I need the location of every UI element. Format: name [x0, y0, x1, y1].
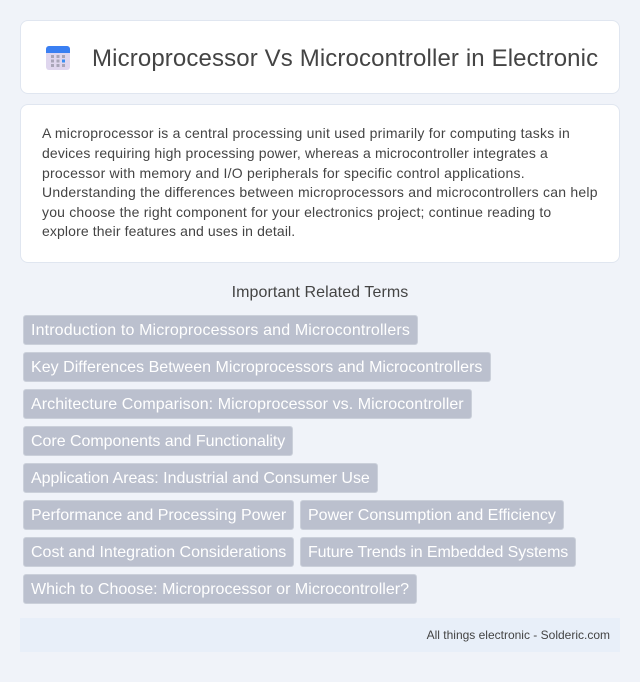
tag: Power Consumption and Efficiency: [308, 507, 556, 524]
heading: related terms: Important Related Terms: [232, 284, 408, 301]
tag: [23, 426, 293, 456]
footer: [20, 618, 620, 652]
tag: Future Trends in Embedded Systems: [308, 544, 568, 561]
text block: description: [42, 125, 598, 239]
tag: Architecture Comparison: Microprocessor vs. Microcontroller: [31, 396, 464, 413]
text block: description: A microprocessor is a central processing unit used primarily for computing tasks in: [42, 125, 570, 141]
tag: Core Components and Functionality: [31, 433, 285, 450]
tag: Key Differences Between Microprocessors and Microcontrollers: [31, 359, 482, 376]
tag: Which to Choose: Microprocessor or Microcontroller?: [31, 581, 409, 598]
text block: description: Understanding the differences between microprocessors and microcontrollers can help: [42, 184, 598, 200]
tag: [23, 352, 491, 382]
panel: header: [20, 20, 620, 94]
tag: [300, 500, 564, 530]
title: Microprocessor Vs Microcontroller in Electronic: [92, 45, 598, 72]
tag: [23, 574, 417, 604]
footer credit: All things electronic - Solderic.com: [427, 628, 610, 642]
text block: description: processor with memory and I/O peripherals for specific control applications.: [42, 165, 525, 181]
tag: [23, 500, 294, 530]
text block: description: you choose the right component for your electronics project; continue reading to: [42, 204, 551, 220]
tag list: [23, 315, 576, 604]
text block: description: devices requiring high processing power, whereas a microcontroller integrates a: [42, 145, 548, 161]
tag: Cost and Integration Considerations: [31, 544, 286, 561]
icon: calendar grid: [46, 46, 70, 70]
tag: [300, 537, 576, 567]
tag: [23, 463, 378, 493]
tag: Introduction to Microprocessors and Microcontrollers: [31, 322, 410, 339]
text block: description: explore their features and uses in detail.: [42, 223, 295, 239]
tag: Performance and Processing Power: [31, 507, 286, 524]
panel: description: [20, 104, 620, 263]
tag: [23, 537, 294, 567]
tag: [23, 389, 472, 419]
tag: [23, 315, 418, 345]
tag: Application Areas: Industrial and Consumer Use: [31, 470, 370, 487]
